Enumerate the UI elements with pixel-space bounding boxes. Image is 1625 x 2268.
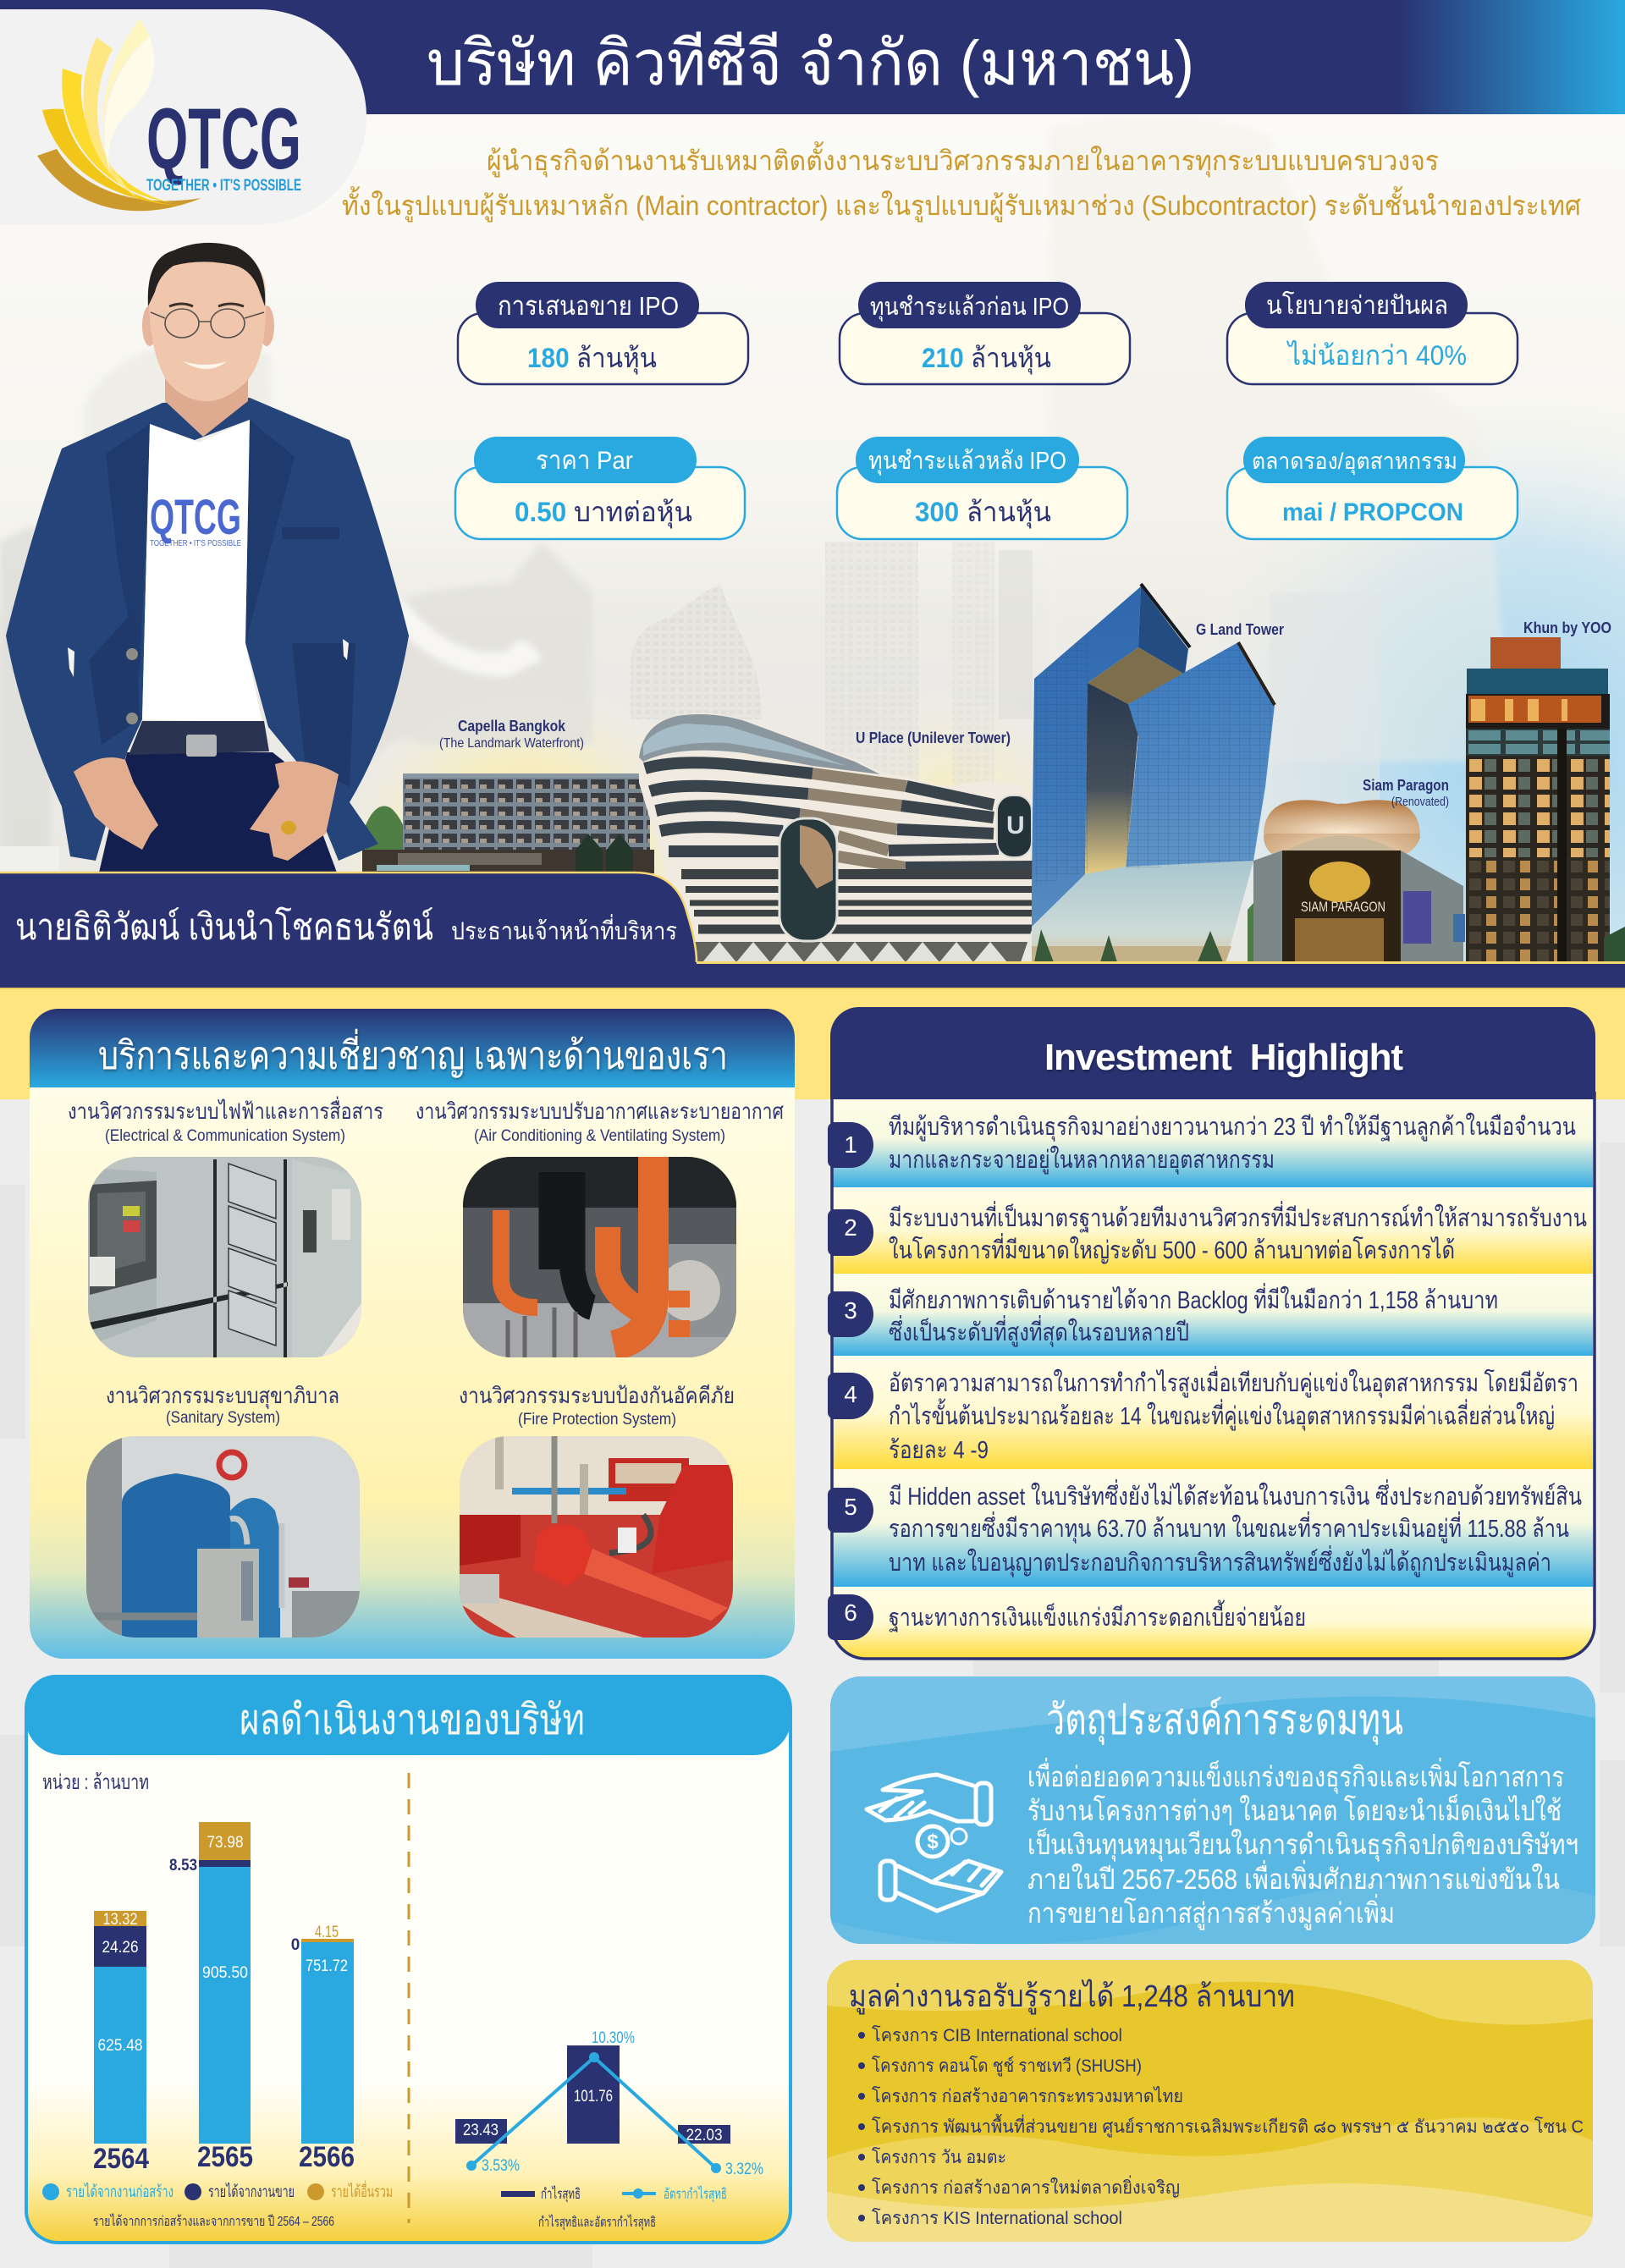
service: air conditioning: (Air Conditioning & Ventilating System)	[474, 1127, 725, 1145]
ears	[142, 306, 157, 346]
net profit chart: 3.32%	[725, 2161, 763, 2178]
bar 2566	[291, 1924, 355, 2173]
portrait: CEO	[6, 243, 409, 873]
card: dividend policy: ไม่น้อยกว่า 40%	[1286, 340, 1467, 371]
revenue caption: รายได้จากการก่อสร้างและจากการขาย ปี 2564 – 2566	[93, 2213, 334, 2229]
highlight 1	[828, 1112, 1576, 1175]
logo tagline: TOGETHER • IT'S POSSIBLE	[146, 177, 301, 195]
building: Capella	[362, 773, 654, 873]
bar 2566: 4.15	[315, 1924, 339, 1941]
highlight 2: 2	[844, 1214, 857, 1241]
eyes and brows	[169, 304, 244, 306]
bar 2565: 905.50	[202, 1964, 248, 1982]
service: sanitary: งานวิศวกรรมระบบสุขาภิบาล	[106, 1383, 339, 1409]
bar 2564	[93, 1911, 149, 2175]
card: dividend policy: นโยบายจ่ายปันผล	[1266, 290, 1448, 320]
bar 2564: 24.26	[102, 1939, 139, 1957]
name plate	[0, 873, 697, 988]
card: paid-up after IPO: ทุนชำระแล้วหลัง IPO	[868, 448, 1066, 476]
highlight 5	[828, 1479, 1582, 1577]
card: par price	[455, 437, 745, 539]
header band	[0, 0, 1625, 114]
card: paid-up after IPO: 300 ล้านหุ้น	[915, 497, 1051, 529]
net profit chart: 10.30%	[592, 2029, 635, 2047]
backlog list: โครงการ KIS International school	[872, 2208, 1122, 2228]
building: Siam Paragon: SIAM PARAGON	[1301, 899, 1385, 915]
profit legend: กำไรสุทธิ	[541, 2185, 581, 2203]
revenue legend	[42, 2180, 393, 2201]
card: paid-up before IPO	[840, 282, 1130, 384]
revenue legend: รายได้จากงานขาย	[208, 2183, 295, 2201]
neck	[165, 372, 248, 437]
subtitle: ทั้งในรูปแบบผู้รับเหมาหลัก (Main contractor) และในรูปแบบผู้รับเหมาช่วง (Subcontractor) ระดับชั้นนำของประเทศ	[342, 186, 1581, 223]
backlog list: โครงการ พัฒนาพื้นที่ส่วนขยาย ศูนย์ราชการเฉลิมพระเกียรติ ๘๐ พรรษา ๕ ธันวาคม ๒๕๕๐ โซน C	[872, 2114, 1584, 2138]
card: par price: ราคา Par	[536, 447, 633, 475]
objectives title: วัตถุประสงค์การระดมทุน	[1046, 1696, 1403, 1745]
service: air conditioning: งานวิศวกรรมระบบปรับอากาศและระบายอากาศ	[416, 1098, 784, 1124]
building labels: (The Landmark Waterfront)	[439, 736, 584, 751]
panel: investment highlight	[828, 1007, 1595, 1659]
shirt	[142, 420, 262, 723]
highlight 4	[828, 1366, 1578, 1464]
highlight 6	[828, 1594, 1306, 1640]
navy footer band under hero	[0, 961, 1625, 989]
revenue legend: รายได้อื่นรวม	[331, 2180, 393, 2201]
card: par price: 0.50 บาทต่อหุ้น	[515, 497, 692, 529]
service: electrical	[68, 1096, 383, 1357]
CEO role: ประธานเจ้าหน้าที่บริหาร	[451, 914, 677, 945]
service: sanitary: (Sanitary System)	[166, 1409, 280, 1427]
face	[149, 245, 266, 401]
card: market	[1227, 437, 1518, 539]
panel: fundraising objectives	[830, 1676, 1595, 1945]
building: Siam Paragon	[1248, 800, 1511, 962]
revenue legend: รายได้จากงานก่อสร้าง	[66, 2183, 174, 2201]
card: IPO offering	[458, 282, 748, 384]
bar 2566: 751.72	[306, 1957, 348, 1975]
highlight 1: มากและกระจายอยู่ในหลากหลายอุตสาหกรรม	[889, 1145, 1275, 1175]
building labels: Khun by YOO	[1523, 619, 1611, 636]
highlight rows	[833, 1099, 1593, 1659]
glasses	[151, 309, 264, 338]
investment title: Investment Highlight	[1044, 1037, 1403, 1078]
lower floors	[681, 874, 1034, 929]
backlog list: โครงการ ก่อสร้างอาคารใหม่ตลาดยิ่งเจริญ	[872, 2175, 1180, 2198]
subtitle: ผู้นำธุรกิจด้านงานรับเหมาติดตั้งงานระบบวิศวกรรมภายในอาคารทุกระบบแบบครบวงจร	[487, 141, 1439, 178]
logo petals	[37, 19, 201, 211]
card: paid-up before IPO: 210 ล้านหุ้น	[922, 343, 1051, 375]
bar 2565: 8.53	[169, 1857, 197, 1874]
logo wordmark: QTCG	[146, 91, 301, 187]
buildings montage	[362, 584, 1625, 969]
service: fire protection: งานวิศวกรรมระบบป้องกันอัคคีภัย	[459, 1383, 735, 1408]
service: fire protection: (Fire Protection System)	[518, 1411, 676, 1429]
card: dividend policy	[1227, 282, 1518, 384]
IPO fact cards	[455, 282, 1518, 539]
highlight 4: 4	[844, 1381, 857, 1407]
service: fire protection	[459, 1383, 735, 1638]
belt	[129, 721, 269, 755]
backlog title: มูลค่างานรอรับรู้รายได้ 1,248 ล้านบาท	[849, 1979, 1295, 2015]
building labels: Siam Paragon	[1363, 777, 1449, 794]
building: U Place: U	[1006, 812, 1025, 839]
highlight 1: 1	[844, 1131, 857, 1158]
bar 2565: 2565	[197, 2141, 253, 2173]
highlight 5: 5	[844, 1494, 857, 1520]
card: market: ตลาดรอง/อุตสาหกรรม	[1252, 449, 1457, 476]
bar 2566: 0	[291, 1936, 300, 1954]
bar 2564: 625.48	[98, 2037, 142, 2055]
shirt logo: QTCG	[150, 490, 241, 545]
roof glazing	[639, 714, 880, 774]
building labels: (Renovated)	[1391, 795, 1449, 809]
net profit chart: 23.43	[463, 2122, 499, 2139]
CEO name: นายธิติวัฒน์ เงินนำโชคธนรัตน์	[15, 906, 433, 948]
card: market: mai / PROPCON	[1282, 498, 1463, 526]
highlight 3: มีศักยภาพการเติบด้านรายได้จาก Backlog ที่มีในมือกว่า 1,158 ล้านบาท	[889, 1283, 1498, 1314]
trousers	[99, 752, 337, 873]
card: paid-up before IPO: ทุนชำระแล้วก่อน IPO	[870, 294, 1069, 322]
building: U Place	[635, 707, 1041, 969]
highlight 3	[828, 1283, 1498, 1347]
card: IPO offering: 180 ล้านหุ้น	[527, 343, 657, 375]
building labels: G Land Tower	[1196, 621, 1284, 638]
building labels: U Place (Unilever Tower)	[856, 729, 1011, 746]
building labels	[439, 619, 1611, 809]
backlog list	[858, 2025, 1584, 2228]
backlog list: โครงการ CIB International school	[872, 2025, 1122, 2045]
objectives text: ภายในปี 2567-2568 เพื่อเพิ่มศักยภาพการแข่งขันใน	[1027, 1860, 1560, 1895]
services header	[30, 1009, 795, 1087]
service: air conditioning	[416, 1098, 784, 1357]
backlog list: โครงการ วัน อมตะ	[872, 2147, 1006, 2167]
card: paid-up after IPO	[837, 437, 1127, 539]
smile	[183, 361, 227, 369]
small gaps between arm and body	[68, 639, 349, 677]
highlight 6: 6	[844, 1599, 857, 1626]
jacket	[6, 398, 409, 861]
objectives text: การขยายโอกาสสู่การสร้างมูลค่าเพิ่ม	[1027, 1894, 1395, 1930]
icon: dollar symbol: $	[927, 1830, 939, 1853]
icon: hands with coins	[867, 1775, 1001, 1911]
profit caption: กำไรสุทธิและอัตรากำไรสุทธิ	[538, 2214, 656, 2231]
company title: บริษัท คิวทีซีจี จำกัด (มหาชน)	[427, 28, 1194, 98]
net profit chart	[455, 2029, 763, 2178]
unit label: หน่วย : ล้านบาท	[42, 1771, 149, 1794]
building labels: Capella Bangkok	[458, 718, 566, 735]
net profit chart: 22.03	[686, 2127, 723, 2144]
objectives text	[1027, 1758, 1578, 1930]
highlight 2: ในโครงการที่มีขนาดใหญ่ระดับ 500 - 600 ล้านบาทต่อโครงการได้	[889, 1233, 1455, 1264]
bar 2564: 13.32	[103, 1911, 137, 1929]
bar 2566: 2566	[299, 2141, 355, 2173]
service: electrical: งานวิศวกรรมระบบไฟฟ้าและการสื่อสาร	[68, 1096, 383, 1124]
service: electrical: (Electrical & Communication System)	[105, 1127, 345, 1145]
building: G Land Tower	[1032, 584, 1275, 962]
hands	[74, 757, 158, 850]
hair	[148, 243, 265, 306]
shirt tagline: TOGETHER • IT'S POSSIBLE	[150, 539, 241, 548]
performance header	[25, 1675, 791, 1755]
net profit chart: 3.53%	[482, 2157, 520, 2175]
services title: บริการและความเชี่ยวชาญ เฉพาะด้านของเรา	[98, 1028, 728, 1077]
investment header	[830, 1007, 1595, 1099]
facade bands	[645, 762, 1037, 867]
logo panel	[0, 9, 366, 224]
backlog list: โครงการ คอนโด ชูช์ ราชเทวี (SHUSH)	[872, 2056, 1142, 2077]
building: Khun by YOO	[1466, 637, 1625, 962]
net profit chart: 101.76	[574, 2088, 613, 2106]
bar 2564: 2564	[93, 2143, 149, 2175]
profit legend	[501, 2185, 727, 2203]
bar 2565	[169, 1822, 253, 2173]
revenue stacked bar chart	[93, 1822, 355, 2175]
bar 2565: 73.98	[207, 1834, 244, 1852]
highlight 6: ฐานะทางการเงินแข็งแกร่งมีภาระดอกเบี้ยจ่ายน้อย	[889, 1599, 1306, 1632]
backlog list: โครงการ ก่อสร้างอาคารกระทรวงมหาดไทย	[872, 2086, 1183, 2106]
highlight 2	[828, 1201, 1587, 1264]
service: sanitary	[86, 1383, 360, 1638]
card: IPO offering: การเสนอขาย IPO	[498, 291, 679, 321]
subtitle	[342, 141, 1581, 223]
panel: backlog	[827, 1960, 1593, 2242]
profit legend: อัตรากำไรสุทธิ	[664, 2185, 727, 2203]
panel: company performance	[25, 1675, 791, 2243]
buttons	[126, 648, 138, 660]
highlight 3: ซึ่งเป็นระดับที่สูงที่สุดในรอบหลายปี	[889, 1315, 1189, 1347]
panel: services	[30, 1009, 795, 1659]
highlight 3: 3	[844, 1297, 857, 1324]
performance title: ผลดำเนินงานของบริษัท	[240, 1696, 585, 1743]
highlight 4: ร้อยละ 4 -9	[889, 1437, 989, 1464]
